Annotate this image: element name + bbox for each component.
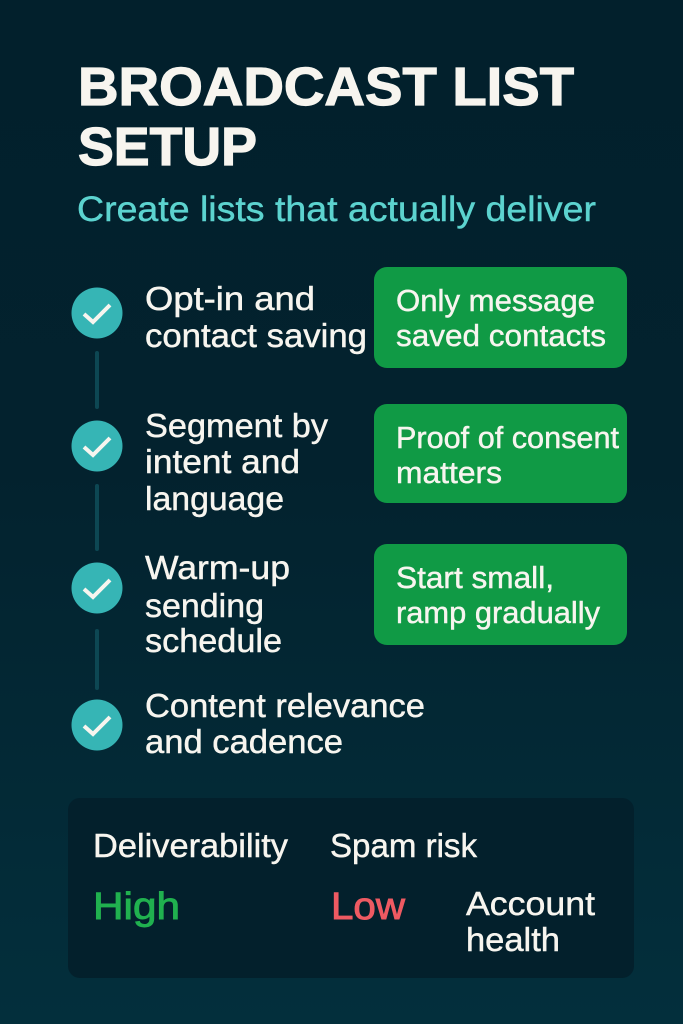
callout: start small, ramp gradually: ramp gradually: [396, 595, 600, 630]
step 3 text: Warm-up: [145, 549, 290, 586]
icon: check 2: [72, 420, 122, 472]
callout: proof of consent matters: Proof of consent: [396, 420, 619, 455]
callout: only message saved contacts: [374, 267, 627, 368]
step 1 text: Opt-in and: [145, 280, 315, 317]
value: high: High: [93, 886, 180, 928]
title: [78, 57, 574, 177]
step 2 text: intent and: [145, 443, 300, 480]
step 4 text: [145, 687, 425, 760]
icon: check 3: [72, 562, 122, 614]
step 1: opt-in and contact saving: [72, 280, 367, 354]
step 3 text: schedule: [145, 622, 282, 659]
step 2: segment by intent and language: [72, 407, 329, 517]
label: account health: Account: [466, 885, 595, 922]
step 1 text: [145, 280, 367, 354]
callout: only message saved contacts: saved contacts: [396, 318, 606, 353]
connector lines: [95, 351, 99, 690]
step 3: warm-up sending schedule: [72, 549, 290, 659]
step 4 text: and cadence: [145, 723, 343, 760]
callout: start small, ramp gradually: [374, 544, 627, 645]
icon: check 4: [72, 700, 122, 750]
step 3 text: [145, 549, 290, 659]
callout: only message saved contacts: Only message: [396, 283, 595, 318]
callout: proof of consent matters: matters: [396, 455, 502, 490]
title: SETUP: [78, 117, 257, 177]
step 4: content relevance and cadence: [72, 687, 425, 760]
label: account health: health: [466, 921, 560, 958]
value: low: Low: [331, 886, 406, 928]
icon: check 1: [72, 288, 122, 338]
label: deliverability: Deliverability: [93, 827, 289, 864]
title: BROADCAST LIST: [78, 57, 574, 117]
step 2 text: [145, 407, 329, 517]
step 4 text: Content relevance: [145, 687, 425, 724]
step 2 text: Segment by: [145, 407, 329, 444]
subtitle: Create lists that actually deliver: [77, 190, 596, 229]
callout: proof of consent matters: [374, 404, 627, 503]
label: account health: [466, 885, 595, 958]
callout: start small, ramp gradually: Start small,: [396, 560, 554, 595]
step 1 text: contact saving: [145, 317, 367, 354]
step 3 text: sending: [145, 587, 264, 624]
step 2 text: language: [145, 480, 284, 517]
panel: metrics: [68, 798, 634, 978]
label: spam risk: Spam risk: [330, 827, 477, 864]
